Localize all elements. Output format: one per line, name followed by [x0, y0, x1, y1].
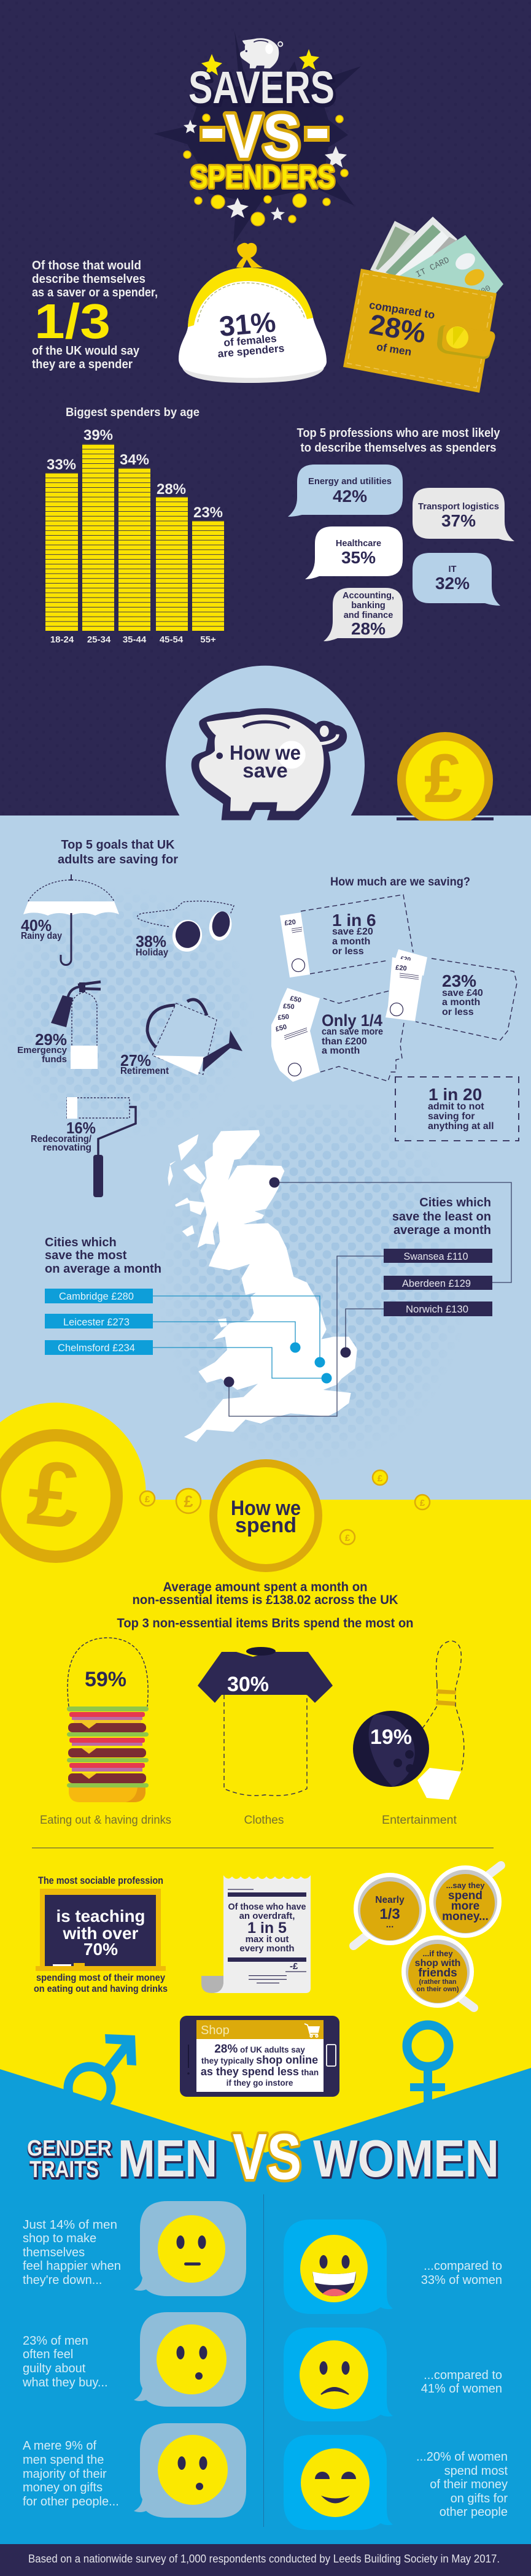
bubble: IT: [413, 553, 500, 606]
row 2: 23% of men: what they buy...: [22, 2376, 108, 2389]
item: eating out burger 59%: Eating out & having drinks: [40, 1814, 171, 1827]
title block: Savers vs Spenders: [153, 31, 361, 244]
heading: adults are saving for: [58, 853, 178, 866]
banknote: 1 in 6: £20: [284, 919, 297, 927]
bubble: transport logistics: 37%: [441, 511, 476, 530]
row 2: 23% of men: 23% of men: [23, 2334, 88, 2348]
Gender traits: GENDER: [28, 2137, 112, 2162]
row 3: 20% of women: on gifts for: [451, 2492, 508, 2505]
icon: female symbol: [407, 2025, 449, 2118]
labels: least saving cities: [384, 1249, 492, 1316]
connector lines: least saving cities: [229, 1182, 511, 1416]
banknote: 23%: a month: [442, 997, 480, 1008]
background: blue gender section: [0, 2068, 531, 2576]
item: entertainment bowling 19%: 19%: [370, 1726, 412, 1749]
banknote: 1 in 6: save £20: [332, 927, 373, 937]
cup 2: money...: [442, 1910, 489, 1923]
purse: 31% of females: [179, 243, 327, 383]
cup 3: (rather than: [419, 1978, 457, 1986]
panel: top 5 professions: [288, 426, 514, 641]
heading: [58, 838, 178, 866]
gold coin: [397, 732, 494, 828]
banknote: 1 in 6: [280, 895, 413, 978]
value labels: 23%: [193, 504, 223, 521]
map of Great Britain: [168, 1130, 357, 1442]
receipt: overdraft 1 in 5: [201, 1875, 311, 1993]
item: entertainment bowling 19%: Entertainment: [382, 1814, 457, 1827]
Gender traits: TRAITS: [29, 2157, 99, 2183]
labels: most saving cities: Chelmsford £234: [58, 1342, 135, 1354]
icon: cart: [304, 2024, 319, 2037]
heading: cities which save the most: [45, 1236, 161, 1276]
Women: WOMEN: [314, 2131, 500, 2189]
cup 3: shop with: [415, 1958, 460, 1969]
smartphone: shop online: 28% of UK adults say: [214, 2043, 305, 2056]
purse: 31% of females: 31%: [218, 306, 277, 342]
labels: least saving cities: Swansea £110: [404, 1251, 468, 1262]
icon: male symbol: [68, 2034, 136, 2110]
heading: [297, 426, 500, 455]
icon: fire extinguisher 29%: funds: [42, 1054, 67, 1065]
row 3: 20% of women: of their money: [430, 2478, 508, 2491]
smartphone: shop online: they typically shop online: [201, 2054, 318, 2066]
age labels: 18-24: [50, 634, 74, 645]
row 1: 33% of women: 33% of women: [421, 2273, 502, 2287]
heading circle: [214, 1463, 318, 1568]
row 2: 23% of men: guilty about: [23, 2362, 86, 2375]
cup 3: [401, 1935, 474, 2008]
banknotes: only 1/4: £50: [277, 1013, 290, 1022]
icon: sunglasses 38%: 38%: [136, 932, 166, 951]
background: dark intro section: [0, 0, 531, 816]
blackboard: most sociable profession: spending most of their money: [36, 1973, 165, 1983]
icon: umbrella 40%: Rainy day: [21, 931, 62, 941]
pound signs on small coins: [145, 1473, 425, 1543]
banknotes: only 1/4: [271, 988, 404, 1082]
pound signs on small coins: £: [420, 1498, 425, 1508]
bubble: energy and utilities: Energy and utilities: [308, 477, 392, 487]
banknotes: only 1/4: £50: [283, 1003, 295, 1011]
row 2: 23% of men: often feel: [23, 2348, 73, 2361]
intro text: 1/3 of the UK: of the UK would say: [32, 344, 140, 358]
men column: [22, 2201, 246, 2518]
cup 2: more: [451, 1900, 479, 1913]
bubble: accounting, banking and finance: 28%: [351, 619, 386, 638]
cup 3: on their own): [416, 1986, 459, 1993]
value labels: 34%: [120, 452, 149, 468]
row 3: 20% of women: [284, 2435, 508, 2530]
wallet: 28% of men: of men: [376, 341, 413, 358]
receipt: overdraft 1 in 5: -£: [290, 1961, 298, 1972]
bubble: transport logistics: [413, 488, 514, 541]
age labels: 25-34: [87, 634, 111, 645]
bar chart: biggest spenders by age: [45, 406, 224, 645]
large pound coin: £: [23, 1440, 85, 1548]
dashed box: 1 in 20: anything at all: [428, 1121, 494, 1132]
cup 2: spend: [448, 1889, 483, 1902]
panel: top 5 saving goals: [17, 838, 242, 1197]
pound signs on small coins: £: [184, 1492, 193, 1511]
intro text: 1/3 of the UK: as a saver or a spender,: [32, 286, 158, 299]
wallet: 28% of men: 28%: [367, 308, 428, 349]
dashed box: 1 in 20: saving for: [428, 1111, 475, 1122]
VS word with dashes: VS: [225, 101, 300, 171]
credit card: IT CARD: [414, 255, 451, 280]
bubble: energy and utilities: 42%: [333, 487, 367, 506]
bubble: accounting, banking and finance: and finance: [344, 611, 393, 620]
bubble: IT: 32%: [435, 574, 470, 593]
wallet strap and button: [437, 325, 495, 359]
heading: cities which save the most: Cities which: [45, 1236, 117, 1249]
Women: WOMEN: [313, 2130, 499, 2188]
city dots: [223, 1177, 351, 1387]
pound signs on small coins: £: [345, 1533, 351, 1543]
bubble: energy and utilities: [288, 465, 403, 517]
item: clothes t-shirt 30%: 30%: [227, 1673, 269, 1696]
bubble: accounting, banking and finance: banking: [351, 601, 386, 611]
SPENDERS word: SPENDERS: [190, 160, 335, 195]
row 3: 9% of men: A mere 9% of: [23, 2439, 97, 2453]
small gold coins: [184, 114, 348, 226]
row 1: 14% of men: feel happier when: [23, 2259, 121, 2273]
bubble: IT: IT: [449, 565, 457, 574]
item: entertainment bowling 19%: [353, 1641, 464, 1827]
cup 1: [354, 1873, 426, 1946]
text: average amount spent: [117, 1580, 414, 1630]
smartphone: shop online: [180, 2016, 339, 2097]
banknotes: only 1/4: a month: [322, 1046, 360, 1056]
wallet: 28% of men: compared to: [368, 299, 436, 321]
row 3: 9% of men: [23, 2423, 246, 2518]
smartphone: shop online: as they spend less than: [201, 2065, 319, 2078]
row 3: 20% of women: other people: [440, 2505, 508, 2519]
banknote: 1 in 6: a month: [332, 936, 370, 947]
small pound coins: [140, 1470, 430, 1544]
Gender traits: GENDER: [27, 2135, 112, 2161]
panel: how much are we saving: [271, 876, 519, 1141]
heading: cities which save the most: on average a month: [45, 1262, 161, 1276]
light blue circle: [166, 666, 365, 816]
dashed box: 1 in 20: [395, 1077, 519, 1141]
heading: Top 5 goals that UK: [61, 838, 175, 852]
row 3: 9% of men: men spend the: [23, 2453, 104, 2467]
smartphone: shop online: Shop: [201, 2024, 230, 2037]
icon: watering can 27%: Retirement: [120, 1066, 169, 1076]
item: eating out burger 59%: [40, 1638, 171, 1827]
Gender traits: TRAITS: [30, 2158, 99, 2184]
wallet: 28% of men: [343, 217, 503, 393]
age labels: 55+: [200, 634, 216, 645]
dashed box: 1 in 20: 1 in 20: [428, 1085, 482, 1104]
age labels: 35-44: [123, 634, 147, 645]
cup 2: ...say they: [446, 1881, 485, 1890]
banknote: 23%: or less: [442, 1007, 474, 1017]
heading text: [231, 1497, 301, 1537]
receipt: overdraft 1 in 5: an overdraft,: [239, 1911, 295, 1921]
gold coin: £: [424, 740, 462, 817]
cup 1: 1/3: [379, 1906, 400, 1922]
dashed box: 1 in 20: admit to not: [428, 1101, 484, 1112]
bubble: accounting, banking and finance: [324, 588, 403, 641]
receipt: overdraft 1 in 5: Of those who have: [228, 1902, 306, 1912]
row 3: 9% of men: money on gifts: [23, 2481, 103, 2494]
icon: sunglasses 38%: [136, 901, 234, 958]
intro text: 1/3 of the UK: describe themselves: [32, 272, 145, 286]
coffee cups: nearly 1/3 spend more with friends: [354, 1865, 502, 2008]
icon: watering can 27%: [120, 1000, 242, 1076]
smartphone: shop online: if they go instore: [227, 2078, 293, 2088]
icon: fire extinguisher 29%: [17, 982, 101, 1069]
Gender traits: [27, 2135, 112, 2184]
banknote: 1 in 6: 1 in 6: [332, 911, 376, 930]
row 2: 41% of women: ...compared to: [424, 2369, 502, 2382]
wallet body: [343, 269, 497, 393]
pound signs on small coins: £: [145, 1494, 150, 1505]
banknote: 23%: £20: [395, 964, 407, 973]
text: average amount spent: Average amount spent a month on: [163, 1580, 367, 1594]
heading: Top 5 professions who are most likely: [297, 426, 500, 440]
row 3: 20% of women: spend most: [444, 2464, 508, 2478]
women column: [284, 2219, 508, 2530]
age labels: 45-54: [160, 634, 184, 645]
heading: How much are we saving?: [330, 876, 470, 889]
footer: source note: [0, 2544, 531, 2576]
SAVERS word: SAVERS: [188, 62, 335, 113]
blackboard: most sociable profession: with over: [63, 1924, 139, 1943]
credit card: [399, 235, 503, 298]
Vs: VS: [233, 2121, 301, 2193]
stars: [184, 49, 347, 220]
Men: MEN: [119, 2131, 219, 2189]
text: average amount spent: Top 3 non-essential items Brits spend the most on: [117, 1616, 414, 1630]
cup 2: [429, 1865, 502, 1938]
cup 3: friends: [418, 1967, 457, 1980]
item: eating out burger 59%: 59%: [85, 1668, 126, 1691]
cup 1: Nearly: [375, 1895, 405, 1905]
icon: watering can 27%: 27%: [120, 1051, 151, 1070]
value labels: 39%: [83, 427, 113, 444]
burst behind title: [153, 31, 361, 244]
row 2: 41% of women: [284, 2327, 502, 2421]
bubble: accounting, banking and finance: Accounting,: [343, 591, 394, 601]
blackboard: most sociable profession: on eating out and having drinks: [34, 1984, 168, 1994]
banknotes: only 1/4: than £200: [322, 1036, 367, 1047]
receipt: overdraft 1 in 5: max it out: [246, 1934, 289, 1945]
heading: cities which save the least: [392, 1196, 491, 1237]
heading: cities which save the least: average a month: [393, 1224, 491, 1237]
icon: umbrella 40%: [21, 874, 119, 965]
heading: to describe themselves as spenders: [301, 441, 496, 455]
blackboard: most sociable profession: 70%: [83, 1940, 118, 1959]
icon: paint roller 16%: [31, 1097, 136, 1197]
row 2: 23% of men: [22, 2312, 246, 2407]
row 3: 9% of men: for other people...: [23, 2495, 119, 2509]
cup 3: ...if they: [422, 1949, 453, 1958]
banknote: 23%: £20: [400, 955, 411, 963]
piggy bank: [192, 708, 347, 820]
icon: paint roller 16%: renovating: [43, 1143, 91, 1153]
value labels: 33%: [47, 457, 76, 473]
banknotes: only 1/4: can save more: [322, 1027, 383, 1037]
bubble: healthcare: [305, 526, 403, 579]
intro text: 1/3 of the UK: [32, 259, 158, 371]
banknotes: [370, 217, 457, 288]
banknotes: only 1/4: £50: [289, 995, 302, 1005]
labels: most saving cities: Leicester £273: [63, 1316, 130, 1328]
item: clothes t-shirt 30%: [198, 1647, 333, 1827]
icon: fire extinguisher 29%: Emergency: [17, 1045, 68, 1055]
banknote: 23%: [324, 949, 517, 1040]
row 1: 14% of men: they're down...: [23, 2273, 102, 2287]
section header: how we spend: [0, 1403, 430, 1568]
large pound coin: [0, 1403, 146, 1557]
purse: 31% of females: are spenders: [217, 342, 285, 360]
labels: most saving cities: [45, 1289, 153, 1355]
row 1: 33% of women: ...compared to: [424, 2259, 502, 2273]
blackboard: most sociable profession: The most sociable profession: [38, 1875, 163, 1886]
age labels: [50, 634, 216, 645]
intro text: 1/3 of the UK: Of those that would: [32, 259, 141, 272]
chart title: Biggest spenders by age: [66, 406, 200, 419]
receipt: overdraft 1 in 5: 1 in 5: [247, 1919, 287, 1937]
purse: 31% of females: of females: [223, 332, 277, 349]
bars as coin stacks: [45, 444, 224, 631]
heading text: [230, 741, 301, 782]
banknotes: only 1/4: Only 1/4: [322, 1011, 382, 1030]
banknote: 1 in 6: or less: [332, 946, 364, 957]
receipt: overdraft 1 in 5: every month: [239, 1943, 295, 1954]
heading: cities which save the least: save the least on: [392, 1210, 491, 1224]
item: clothes t-shirt 30%: Clothes: [244, 1814, 284, 1827]
title: gender traits men vs women: [27, 2121, 500, 2193]
heading text: How we: [230, 741, 301, 764]
value labels: 28%: [157, 481, 186, 498]
cup 1: ...: [386, 1919, 393, 1930]
Men: MEN: [118, 2130, 217, 2188]
background: yellow spending section: [0, 1500, 531, 2175]
row 3: 9% of men: majority of their: [23, 2467, 107, 2481]
connector lines: most saving cities: [153, 1296, 327, 1378]
blackboard: most sociable profession: [34, 1875, 168, 1994]
heading text: save: [242, 759, 288, 782]
icon: paint roller 16%: Redecorating/: [31, 1134, 92, 1144]
icon: sunglasses 38%: Holiday: [136, 947, 168, 958]
UK map with city savings: [45, 1130, 511, 1442]
banknote: 23%: save £40: [442, 988, 483, 998]
banknote: 23%: 23%: [442, 971, 476, 990]
labels: least saving cities: Norwich £130: [406, 1303, 468, 1315]
row 1: 14% of men: [23, 2201, 246, 2296]
piggy bank icon: [240, 38, 282, 68]
value labels: [47, 427, 223, 521]
bubble: healthcare: 35%: [341, 548, 376, 567]
icon: umbrella 40%: 40%: [21, 916, 52, 935]
footer: source note: Based on a nationwide survey of 1,000 respondents conducted by Leeds Building Society in May 2017.: [28, 2553, 500, 2565]
banknotes: only 1/4: £50: [275, 1024, 288, 1033]
heading: cities which save the least: Cities which: [419, 1196, 491, 1209]
row 1: 14% of men: themselves: [23, 2246, 85, 2259]
credit card: 001: [475, 282, 492, 298]
intro text: 1/3 of the UK: 1/3: [34, 294, 110, 349]
VS word with dashes: [200, 101, 330, 171]
bubble: transport logistics: Transport logistics: [418, 502, 499, 512]
background: light blue saving section: [0, 816, 531, 1500]
heading text: How we: [231, 1497, 301, 1520]
text: average amount spent: non-essential items is £138.02 across the UK: [133, 1593, 398, 1607]
heading text: spend: [235, 1514, 297, 1537]
row 3: 20% of women: ...20% of women: [416, 2450, 508, 2464]
row 1: 14% of men: shop to make: [23, 2232, 96, 2245]
icon: fire extinguisher 29%: 29%: [35, 1030, 67, 1049]
bubble: healthcare: Healthcare: [336, 539, 381, 549]
pound signs on small coins: £: [378, 1473, 383, 1484]
icon: paint roller 16%: 16%: [66, 1119, 96, 1137]
SAVERS word: SAVERS: [190, 64, 336, 115]
row 2: 41% of women: 41% of women: [421, 2382, 502, 2396]
labels: least saving cities: Aberdeen £129: [402, 1278, 471, 1289]
section header: how we save: [166, 666, 494, 828]
intro text: 1/3 of the UK: they are a spender: [32, 358, 133, 371]
row 1: 33% of women: [284, 2219, 502, 2314]
labels: most saving cities: Cambridge £280: [59, 1290, 134, 1302]
heading: cities which save the most: save the most: [45, 1249, 127, 1262]
blackboard: most sociable profession: is teaching: [56, 1907, 145, 1926]
row 1: 14% of men: Just 14% of men: [23, 2218, 117, 2232]
